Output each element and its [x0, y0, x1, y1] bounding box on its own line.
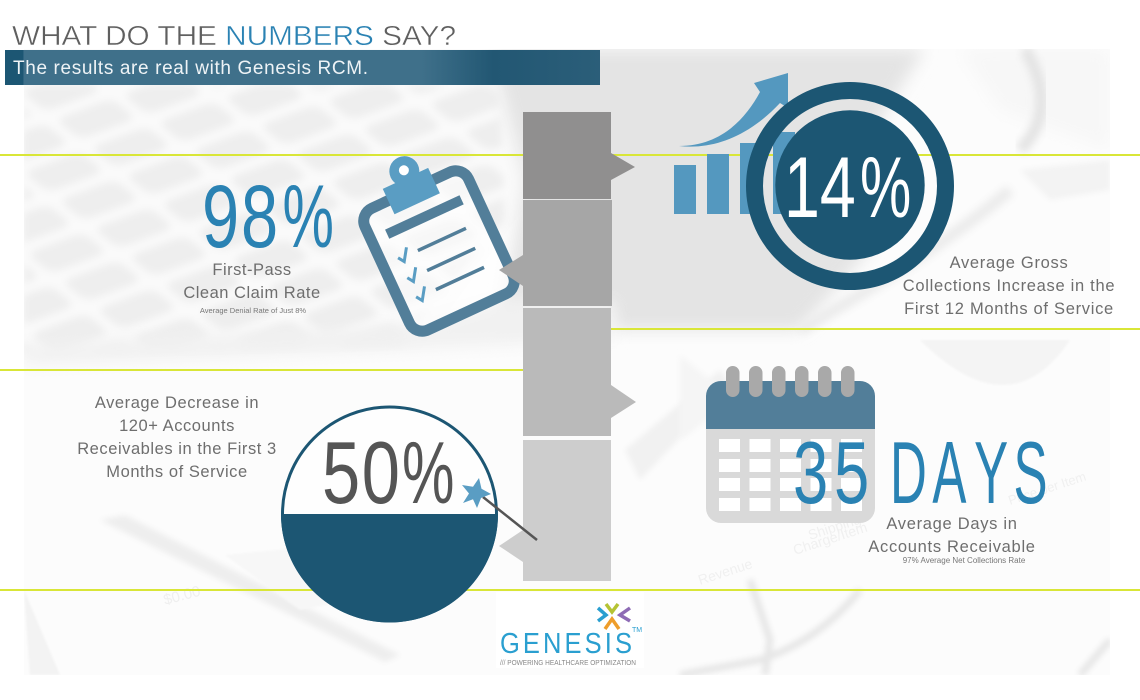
icon: logo mark: [598, 604, 630, 629]
accent lines: [0, 154, 1140, 591]
background photo: calculator and paperwork: $0.00: [162, 583, 202, 609]
icon: clipboard: [344, 134, 519, 336]
tagline: /// POWERING HEALTHCARE OPTIMIZATION: [500, 660, 636, 667]
stat: 14%: [784, 139, 911, 236]
stat: 14%: %: [860, 139, 911, 236]
background photo: calculator and paperwork: Charge/Item: [791, 519, 869, 558]
icon: star wand: [462, 478, 537, 540]
stat: 14%: 14: [784, 140, 856, 236]
stat: 35 days: DAYS: [890, 425, 1048, 523]
panel: 35 days in A/R: [706, 366, 1048, 565]
stat: 50%: 50: [322, 424, 401, 522]
icon: calendar: [706, 366, 875, 523]
stat: 35 days: 35: [793, 425, 875, 523]
note: denial rate: Average Denial Rate of Just 8%: [200, 306, 306, 315]
label: average days in accounts receivable: Average Days in: [886, 515, 1018, 533]
panel: 98 percent clean claim rate: [183, 166, 334, 315]
label: gross collections increase: Collections Increase in the: [903, 277, 1115, 295]
label: average days in accounts receivable: Accounts Receivable: [868, 538, 1036, 556]
panel: 14 percent collections increase: [674, 73, 1115, 318]
subtitle banner: [5, 50, 600, 85]
stat: 35 days: [793, 425, 1048, 523]
label: gross collections increase: Average Gross: [950, 254, 1068, 272]
label: decrease in accounts receivable: Receivables in the First 3: [77, 440, 277, 458]
logo: Genesis: [496, 592, 644, 668]
label: decrease in accounts receivable: Average Decrease in: [95, 394, 259, 412]
title: WHAT DO THE NUMBERS SAY?: [12, 20, 456, 51]
icon: ring and disc: [754, 90, 946, 282]
wordmark: GENESIS: [500, 626, 632, 659]
background photo: calculator and paperwork: Price per Item: [1006, 469, 1088, 508]
stat: 98%: %: [282, 166, 334, 266]
note: net collections rate: 97% Average Net Collections Rate: [903, 556, 1026, 565]
background photo: calculator and paperwork: Revenue: [696, 555, 754, 588]
stat: 50%: [322, 423, 454, 522]
icon: half-filled circle: [281, 407, 498, 622]
label: first-pass clean claim rate: Clean Claim Rate: [183, 284, 321, 302]
central timeline blocks: [499, 112, 636, 581]
label: decrease in accounts receivable: Months of Service: [106, 463, 248, 481]
background photo: calculator and paperwork: Shipping: [806, 511, 863, 543]
panel: 50 percent A/R decrease: [77, 394, 537, 622]
trademark: TM: [632, 627, 642, 634]
icon: rising bar chart with arrow: [674, 73, 795, 214]
stat: 98%: [202, 166, 334, 266]
stat: 50%: %: [402, 423, 454, 522]
label: gross collections increase: First 12 Months of Service: [904, 300, 1114, 318]
label: decrease in accounts receivable: 120+ Accounts: [119, 417, 235, 435]
subtitle banner: The results are real with Genesis RCM.: [13, 58, 368, 79]
label: first-pass clean claim rate: First-Pass: [212, 261, 292, 279]
stat: 98%: 98: [202, 167, 280, 266]
